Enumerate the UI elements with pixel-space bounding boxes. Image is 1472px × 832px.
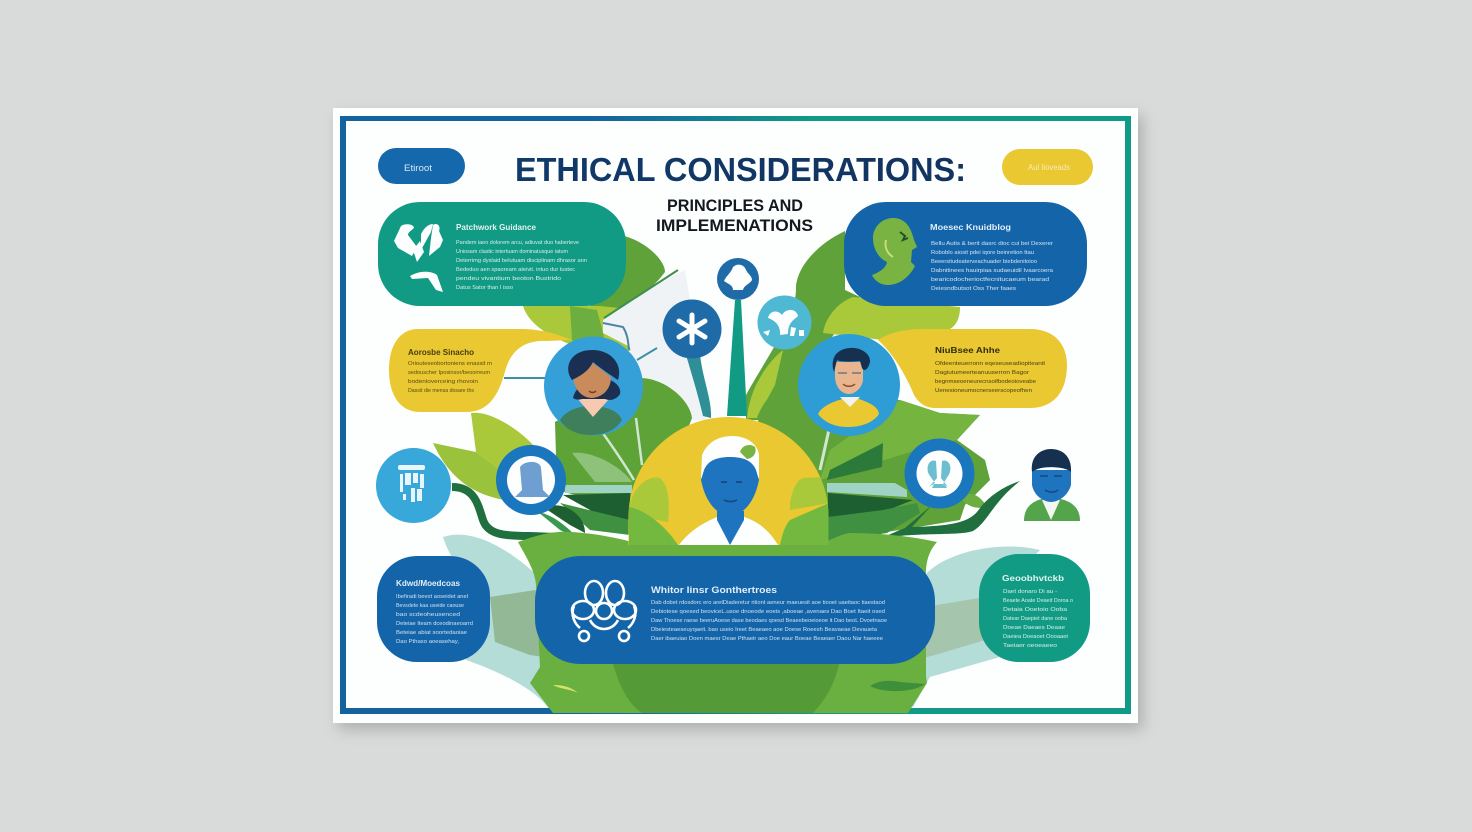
icon: light blue circle — [758, 296, 812, 350]
body text: Doeae Daeaes Deaae — [1003, 625, 1065, 631]
body text — [651, 600, 887, 642]
body text: Datus Sator than I isso — [456, 285, 513, 291]
body text: Uenesioneumocnerseerscopeofhen — [935, 388, 1032, 394]
central dark fronds — [538, 483, 987, 543]
body text: Roboblo aiosit pdei iqore beinretion ttau — [931, 250, 1034, 256]
body text — [935, 361, 1046, 394]
portrait: central person on yellow dome — [628, 417, 830, 545]
icon: ring left — [496, 445, 566, 515]
body text: Datear Daepiet dane ooba — [1003, 616, 1068, 622]
body text: Beaete Aoate Deaeit Doroa o — [1003, 598, 1073, 604]
icon: ornamental flower creature — [572, 581, 636, 641]
body text: Debiotese qoesed beoviceL.usoe dnoeode eoeis ,aboeae ,avenaes Dao Boet Itaeit osed — [651, 609, 885, 615]
heading: Geoobhvtckb — [1002, 573, 1064, 583]
body text: begnmseoeneurecnsoifbodeoioveabe — [935, 379, 1036, 385]
body text: Deiesndbutsot Oss Ther faaes — [931, 286, 1016, 292]
body text — [408, 361, 492, 394]
panel: upper left teal — [378, 202, 626, 306]
icon: ring right — [904, 438, 974, 508]
body text: Daeiea Doeaoet Oooaaet — [1003, 634, 1068, 640]
upper left leaves — [504, 235, 706, 420]
body text — [456, 240, 587, 291]
body text: Daer ibaeuiao Doen maesr Deae Pthaeir aeo Doe eaur Boeae Beaeaer Daou Nar haeeee — [651, 636, 883, 642]
body text: Beeersitudeaterveachuader biebdenitoioo — [931, 259, 1037, 265]
body text: Dabnitinees hauirpiaa sudaeuidil Ivaarcoera — [931, 268, 1054, 274]
panel: middle right yellow — [878, 329, 1067, 408]
panel: middle left yellow — [389, 329, 572, 412]
body text: pendeu vivantium beoton Bustrido — [456, 276, 561, 282]
body text — [931, 241, 1054, 292]
panel: upper right blue — [844, 202, 1087, 306]
body text: Deteiae Iteam dceodinaeoarrd — [396, 621, 473, 627]
body text: Uniosam clastic intertuam dominatusque iatum — [456, 249, 568, 255]
body text: bodenioverceing rhovoin — [408, 379, 478, 385]
body text: Taeiaer oeoeaeeo — [1003, 643, 1057, 649]
pill: top left — [378, 148, 465, 184]
heading: NiuBsee Ahhe — [935, 345, 1000, 355]
body text: Dassit die mensa dosare ths — [408, 388, 474, 394]
panel: lower right teal — [979, 554, 1090, 662]
body text — [396, 594, 473, 645]
portrait: right person — [1024, 449, 1080, 521]
icon: left light blue circle — [376, 448, 451, 523]
subtitle: IMPLEMENATIONS — [656, 216, 813, 235]
body text: Dbeiesteaeseuyqaeit. bao useio Ireet Beaeaeo aoe Doese Roeesh Beavaeae Devaueta — [651, 627, 878, 633]
body text: bearicodocherioctfecnitucaeum bearad — [931, 277, 1049, 283]
middle left leaves — [433, 378, 692, 510]
left vine — [452, 483, 552, 540]
icon: figures — [394, 224, 443, 292]
subtitle — [656, 196, 813, 235]
body text: Pandem iaeo dolorem arcu, adiuvat duo haberteve — [456, 240, 579, 246]
panel: lower left blue — [377, 556, 490, 662]
subtitle: PRINCIPLES AND — [667, 196, 803, 215]
body text: Bededuo aen spaoream ateivit. intuo dur tustec — [456, 267, 575, 273]
stem: top icon — [727, 300, 747, 416]
green bowl — [518, 532, 937, 713]
title: ETHICAL CONSIDERATIONS: — [515, 151, 966, 188]
poster card — [333, 108, 1143, 730]
body text: Oriouteseobortoniens enassit m — [408, 361, 492, 367]
body text: Deterrimg dyslaid belutuam disciplinam dhrasor ann — [456, 258, 587, 264]
body text: Ibefiradi beext aoseidet anel — [396, 594, 468, 600]
body text: Daw Thoese raese beeruAoese dase beodaes qoesd Beaeebeoeioeoe it Dao beoL Dvoetnaoe — [651, 618, 887, 624]
pill: top right: Aul Iioveads — [1028, 163, 1070, 172]
body text — [1003, 589, 1073, 649]
right vine — [883, 481, 1020, 538]
body text: Dao Pthaxo aoeasehay, — [396, 639, 459, 645]
portrait: man — [798, 334, 900, 436]
central plant illustration — [433, 231, 1040, 713]
body text: Dab dobet rdosdorc ero aretDiaderetur ritiont aeneur maeuesit aoe tiooet uaeitaoc tiaestaod — [651, 600, 885, 606]
body text: sedouscher Iposinsor/beoorreum — [408, 370, 490, 376]
icon: top circle — [717, 258, 759, 300]
body text: Daet donaro Di au - — [1003, 589, 1057, 595]
pill: top left: Etiroot — [404, 163, 433, 173]
body text: Detaia Ooetoio Ooba — [1003, 607, 1068, 613]
body text: Ofdeenteuerronn eqeseuseadiopiteanit — [935, 361, 1046, 367]
heading: Moesec Knuidblog — [930, 222, 1011, 232]
body text: Bevsdete kaa useide caouse — [396, 603, 464, 609]
heading: Patchwork Guidance — [456, 222, 536, 232]
icon: asterisk circle — [662, 300, 722, 358]
pill: top right — [1002, 149, 1093, 185]
icon: green head profile — [872, 218, 917, 285]
body text: bao scdeoheusenced — [396, 612, 460, 618]
panel: lower centre blue — [535, 556, 935, 664]
heading: Kdwd/Moedcoas — [396, 578, 460, 588]
upper right leaves — [746, 231, 990, 540]
pale water flanks — [443, 535, 1040, 708]
stem: asterisk — [686, 355, 711, 418]
body text: Bellu Autis & berit dasrc dioc cui bei Dexerer — [931, 241, 1053, 247]
heading: Whitor Iinsr Gonthertroes — [651, 585, 777, 595]
portrait: woman — [544, 336, 643, 436]
body text: Dagiutumeerteanuuserron Bagor — [935, 370, 1029, 376]
heading: Aorosbe Sinacho — [408, 347, 474, 357]
body text: Beteiae abiat soortedaoiae — [396, 630, 467, 636]
